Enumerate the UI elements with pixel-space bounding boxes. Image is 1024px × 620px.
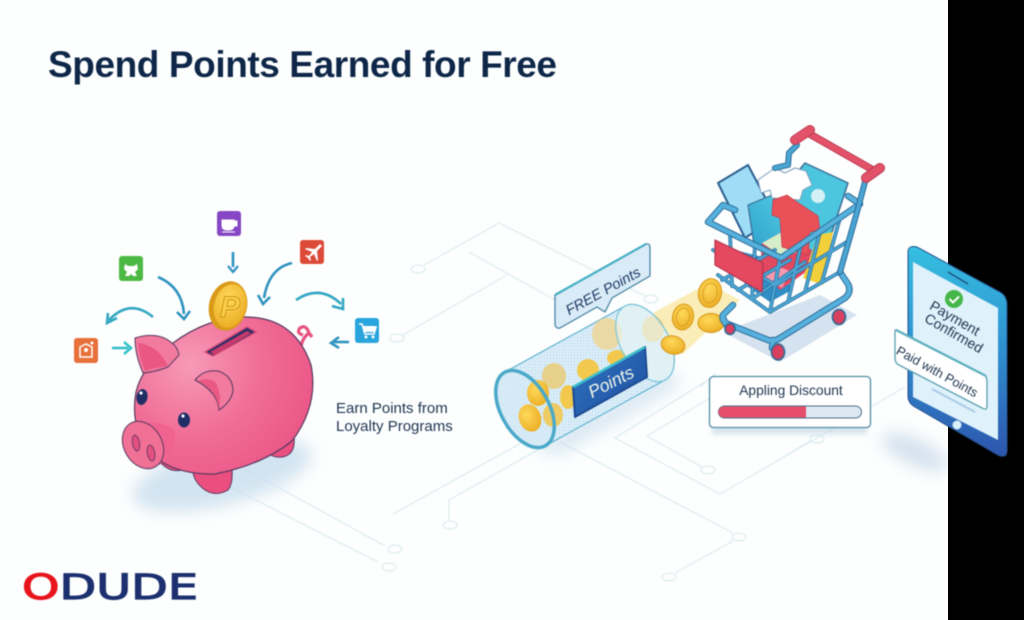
- icon: green loyalty: [119, 256, 143, 281]
- pig snout: [114, 414, 175, 476]
- tube shadow: [530, 368, 680, 455]
- progress track: [718, 406, 862, 418]
- phone home button: [952, 420, 962, 430]
- tube body: [505, 304, 674, 446]
- pig eyes: [135, 388, 190, 428]
- icon: cart loyalty: [355, 318, 379, 343]
- tube interior: [484, 361, 566, 457]
- caption: earn points: Loyalty Programs: [336, 418, 453, 435]
- tube coins: [515, 316, 664, 435]
- panel shadow: [712, 418, 867, 434]
- screen faded line: [932, 389, 975, 412]
- cart shadow: [723, 295, 857, 362]
- coin beam: [653, 283, 740, 354]
- applying discount panel: [710, 376, 870, 434]
- free points speech bubble: FREE Points: [563, 265, 644, 319]
- red shirt: [772, 195, 820, 255]
- arrows into piggy bank: [107, 252, 349, 354]
- panel box: [710, 376, 870, 428]
- icon: coffee loyalty: [217, 211, 241, 236]
- shopping cart: [708, 130, 880, 362]
- confirmed check: [945, 290, 963, 308]
- cart red panel: [715, 240, 763, 292]
- phone body: [908, 247, 1007, 456]
- cart handle: [795, 130, 880, 178]
- title: Spend Points Earned for Free: [48, 44, 557, 85]
- coin slot: [205, 327, 256, 356]
- pig body: [134, 317, 313, 474]
- payment confirmed text: Payment: [927, 297, 983, 339]
- flying coins: [659, 276, 724, 357]
- transparent points tube: [484, 295, 686, 457]
- gold coin: P: [220, 291, 241, 324]
- points label: Points: [585, 362, 637, 402]
- cart yellow bag: [803, 232, 833, 285]
- pig tail: [299, 327, 312, 346]
- phone speaker: [948, 272, 968, 284]
- free points speech bubble: [555, 244, 650, 328]
- circuit background lines: [232, 223, 905, 581]
- payment confirmed phone: [894, 247, 1007, 456]
- cart frame and handle post: [723, 145, 865, 348]
- paid with points card: [894, 330, 987, 409]
- payment confirmed text: Confirmed: [922, 310, 986, 356]
- cart tablet: [770, 163, 848, 262]
- gold coin: [204, 277, 252, 335]
- piggy bank with loyalty icons: [74, 211, 379, 526]
- panel label: Appling Discount: [739, 383, 843, 398]
- phone screen: [913, 262, 998, 440]
- pig right ear: [195, 371, 233, 410]
- progress fill: [718, 406, 806, 418]
- tube front ring: [484, 361, 566, 457]
- cart phone: [718, 165, 776, 238]
- white shirt: [758, 168, 812, 200]
- pig shadow: [125, 424, 319, 526]
- caption: earn points: Earn Points from: [336, 400, 448, 417]
- tube back end: [604, 295, 686, 391]
- cart box: [760, 233, 812, 290]
- phone shadow: [877, 425, 953, 479]
- ODUDE logo: O DUDE: [22, 568, 198, 608]
- cart laptop: [748, 195, 795, 250]
- cart wheels: [725, 310, 846, 360]
- points label: [573, 347, 647, 417]
- cart wire basket: [708, 196, 860, 312]
- icon: orange loyalty: [74, 338, 98, 363]
- icon: plane loyalty: [300, 240, 324, 264]
- cart lower items: [735, 250, 792, 302]
- paid with points card: Paid with Points: [894, 343, 981, 400]
- pig left ear: [135, 335, 179, 373]
- pig legs: [160, 436, 294, 494]
- black right margin: [948, 0, 1024, 620]
